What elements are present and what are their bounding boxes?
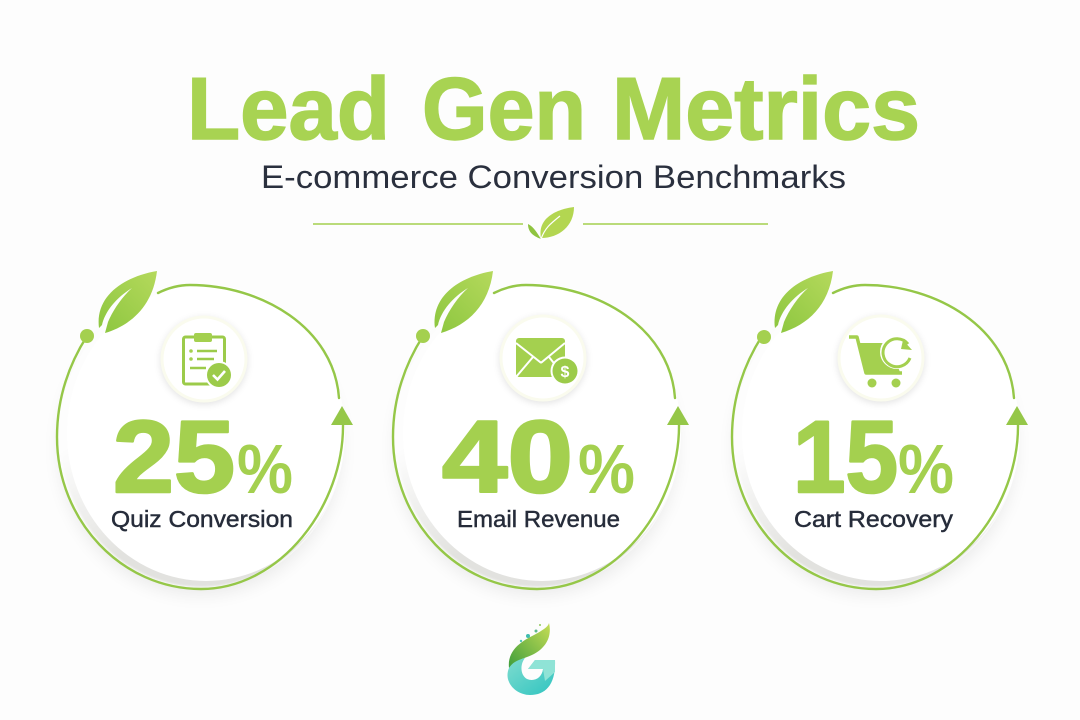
label: email revenue: Email Revenue [457,506,620,532]
title: Gen [422,59,586,158]
panel: quiz conversion [57,271,353,594]
icon: clipboard with check [161,317,247,404]
icon: leaf [775,271,833,333]
icon: envelope with dollar [500,316,586,403]
subtitle: E-commerce Conversion Benchmarks [261,159,846,195]
icon: cart with recovery arrow [838,316,924,403]
stat: 40%: 40 [442,400,573,514]
icon: brand logo [507,623,555,695]
panel disc with shadow [733,285,1020,594]
title: Lead [187,59,390,158]
panel disc with shadow [394,285,681,594]
icon: leaf [99,271,157,333]
icon: envelope with dollar: $ [561,364,570,381]
stat: 25%: % [237,430,293,508]
stat: 40%: % [578,430,635,508]
icon: leaf [435,271,493,333]
stat: 40% [442,400,635,514]
panel disc with shadow [58,285,345,594]
stat: 25%: 25 [113,400,235,514]
stat: 15%: % [898,430,954,508]
stat: 25% [113,400,293,514]
label: quiz conversion: Quiz Conversion [111,506,293,532]
stat: 15%: 15 [793,400,898,514]
title: Metrics [612,59,920,158]
panel: cart recovery [732,271,1028,594]
panel: email revenue [393,271,689,594]
title [187,59,920,158]
circular arrow ring [393,285,689,589]
circular arrow ring [57,285,353,589]
circular arrow ring [732,285,1028,589]
divider with leaf [313,207,768,239]
label: cart recovery: Cart Recovery [794,506,954,532]
